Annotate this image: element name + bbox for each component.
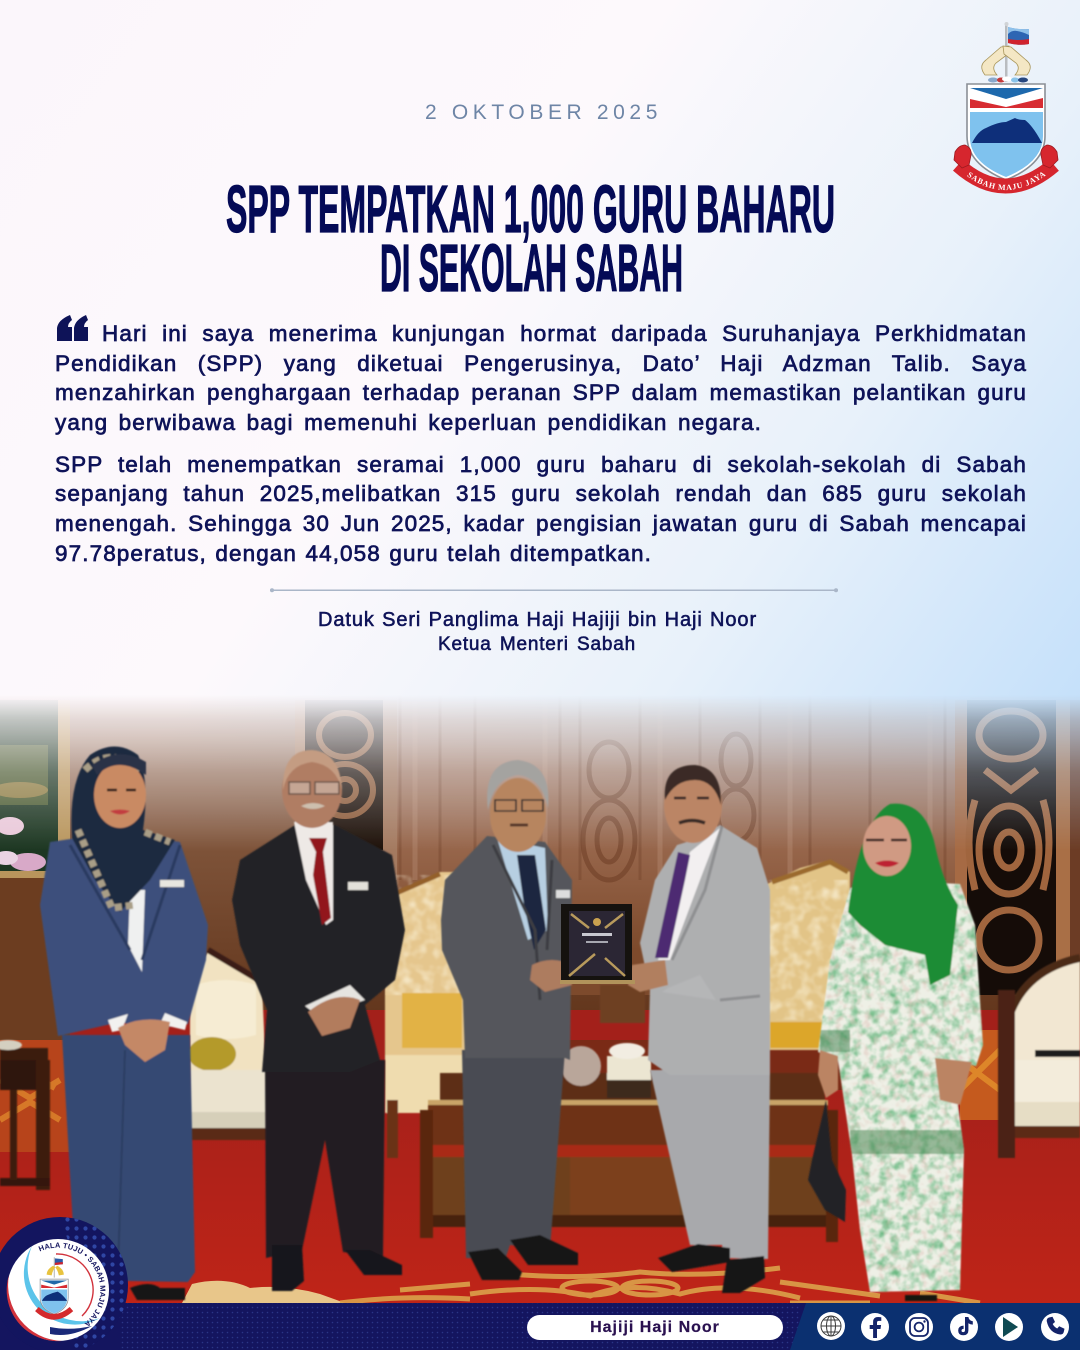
logo badge: Hala Tuju Sabah Maju Jaya bbox=[0, 1217, 128, 1348]
quote paragraph 2 bbox=[55, 452, 1027, 566]
badge curved text: HALA TUJU • SABAH MAJU JAYA bbox=[38, 1242, 106, 1326]
photo: group portrait with plaque presentation bbox=[0, 700, 1080, 1350]
icon: instagram bbox=[905, 1313, 933, 1341]
quote paragraph 2: sepanjang tahun 2025,melibatkan 315 guru sekolah rendah dan 685 guru sekolah bbox=[55, 481, 1027, 506]
icon: tiktok bbox=[950, 1313, 978, 1341]
attribution: Ketua Menteri Sabah bbox=[438, 634, 636, 655]
quote paragraph 2: menengah. Sehingga 30 Jun 2025, kadar pengisian jawatan guru di Sabah mencapai bbox=[55, 511, 1027, 536]
icon: video play bbox=[995, 1313, 1023, 1341]
furniture: gold armchair right bbox=[765, 860, 850, 1050]
date: 2 OKTOBER 2025 bbox=[425, 101, 662, 124]
handbag bbox=[808, 1100, 846, 1222]
title: DI SEKOLAH SABAH bbox=[380, 231, 683, 306]
plaque held by the two men bbox=[560, 904, 635, 984]
icon: Sabah state crest bbox=[953, 22, 1059, 194]
quote paragraph 1: menzahirkan penghargaan terhadap peranan SPP dalam memastikan pelantikan guru bbox=[55, 380, 1027, 405]
furniture: gold armchair left bbox=[385, 872, 470, 1158]
crest motto: SABAH MAJU JAYA bbox=[967, 172, 1046, 190]
carpet gold motif bbox=[340, 1268, 980, 1303]
quote paragraph 2: SPP telah menempatkan seramai 1,000 guru baharu di sekolah-sekolah di Sabah bbox=[55, 452, 1027, 477]
quote paragraph 2: 97.78peratus, dengan 44,058 guru telah ditempatkan. bbox=[55, 541, 652, 566]
furniture: cream sofa left bbox=[188, 950, 268, 1140]
person 4: man in light grey suit bbox=[628, 765, 770, 1293]
person 1: woman in navy suit bbox=[40, 746, 208, 1300]
quote paragraph 1: yang berwibawa bagi memenuhi keperluan pendidikan negara. bbox=[55, 410, 762, 435]
curtain wall bbox=[385, 738, 955, 995]
icon: phone bbox=[1041, 1313, 1069, 1341]
person 5: woman in green floral baju kurung bbox=[810, 804, 990, 1301]
quote paragraph 1 bbox=[54, 321, 1027, 435]
icon: facebook bbox=[861, 1313, 889, 1341]
flower painting bbox=[0, 700, 62, 872]
photo background: wall, panels, curtains bbox=[0, 700, 1080, 1040]
furniture: cream chair right bbox=[998, 958, 1080, 1158]
bottom bar bbox=[0, 1303, 1080, 1350]
quote paragraph 1: Hari ini saya menerima kunjungan hormat daripada Suruhanjaya Perkhidmatan bbox=[102, 321, 1027, 346]
icon: opening quotation mark bbox=[57, 315, 88, 341]
carved wall ornaments bbox=[583, 734, 754, 880]
floor: red carpet and rug bbox=[0, 1010, 1080, 1303]
motto ribbon bbox=[958, 165, 1054, 186]
small crest inside badge bbox=[37, 1257, 71, 1317]
person 2: man in black suit bbox=[232, 750, 405, 1291]
attribution: Datuk Seri Panglima Haji Hajiji bin Haji Noor bbox=[318, 609, 757, 631]
furniture: coffee table with bowl and tissue box bbox=[420, 985, 838, 1242]
quote paragraph 1: Pendidikan (SPP) yang diketuai Pengerusinya, Dato’ Haji Adzman Talib. Saya bbox=[55, 351, 1027, 376]
arms holding flag bbox=[982, 46, 1009, 75]
name pill: Hajiji Haji Noor bbox=[590, 1319, 720, 1336]
icon: globe bbox=[817, 1312, 845, 1340]
title bbox=[226, 172, 835, 306]
name pill bbox=[527, 1315, 783, 1340]
attribution bbox=[318, 609, 757, 655]
dark carved panel right bbox=[955, 700, 1080, 1000]
person 3: man in dark grey suit bbox=[441, 760, 578, 1280]
gold frame bbox=[0, 700, 70, 878]
lower-left wall bbox=[0, 878, 70, 1048]
furniture: left side table bbox=[0, 1040, 50, 1190]
dark carved panel centre-left bbox=[305, 700, 397, 880]
carpet cream patch left bbox=[182, 1281, 345, 1303]
